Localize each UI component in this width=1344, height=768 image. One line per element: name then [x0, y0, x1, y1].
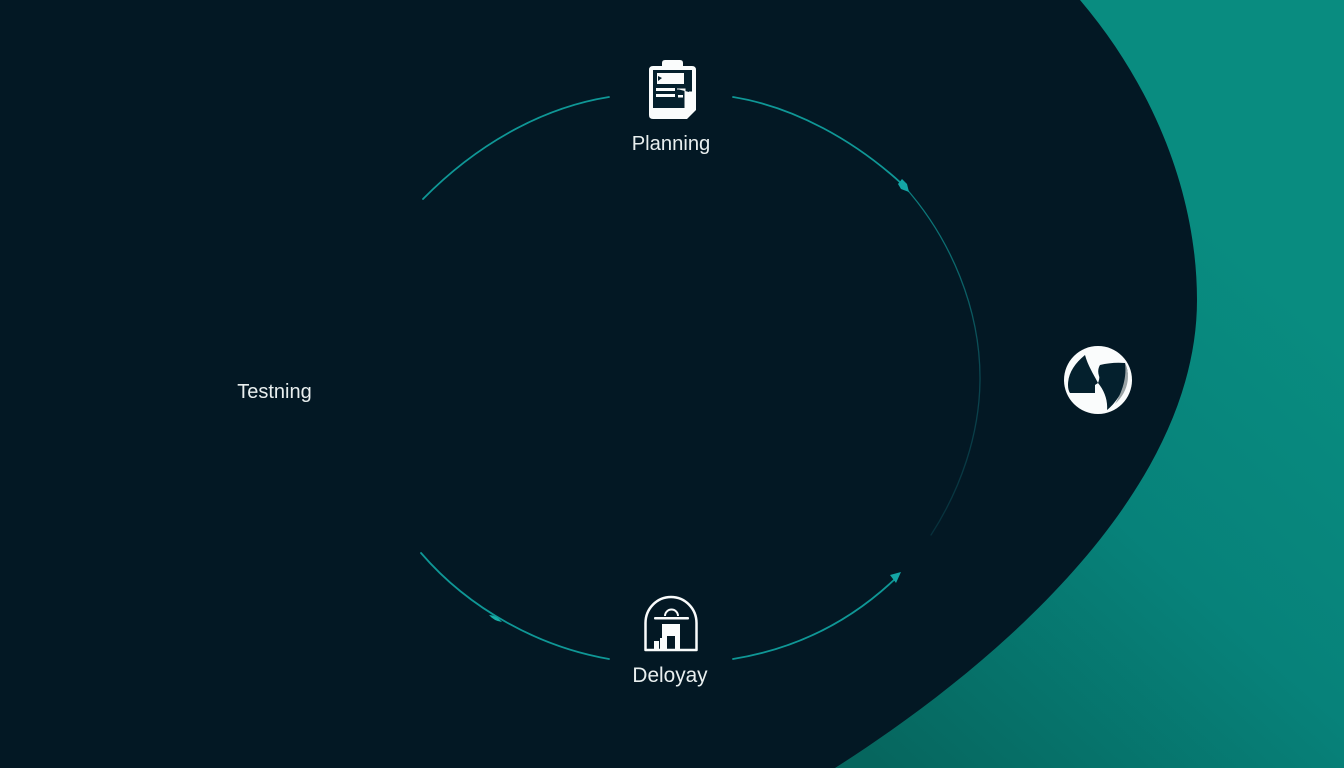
arc: right side: [904, 186, 980, 535]
arc: deploy to testing: [421, 553, 609, 659]
icon: planning clipboard: [649, 60, 696, 119]
icon: deploy building: [646, 597, 696, 650]
arrow head: lower right: [890, 572, 901, 583]
label: Planning: Planning: [632, 133, 710, 155]
arc: next stage to deploy: [733, 578, 896, 659]
label: Deloyay: Deloyay: [632, 664, 708, 687]
arrow marker: upper right: [898, 179, 909, 192]
arc: testing to planning: [423, 97, 609, 199]
label: Testning: Testning: [237, 381, 312, 403]
teal curved panel: [835, 0, 1344, 768]
cycle arcs: [421, 97, 980, 659]
arc marker: lower left: [489, 615, 502, 622]
arc: planning to next stage: [733, 97, 902, 184]
icon: cycle globe: [1064, 346, 1132, 414]
